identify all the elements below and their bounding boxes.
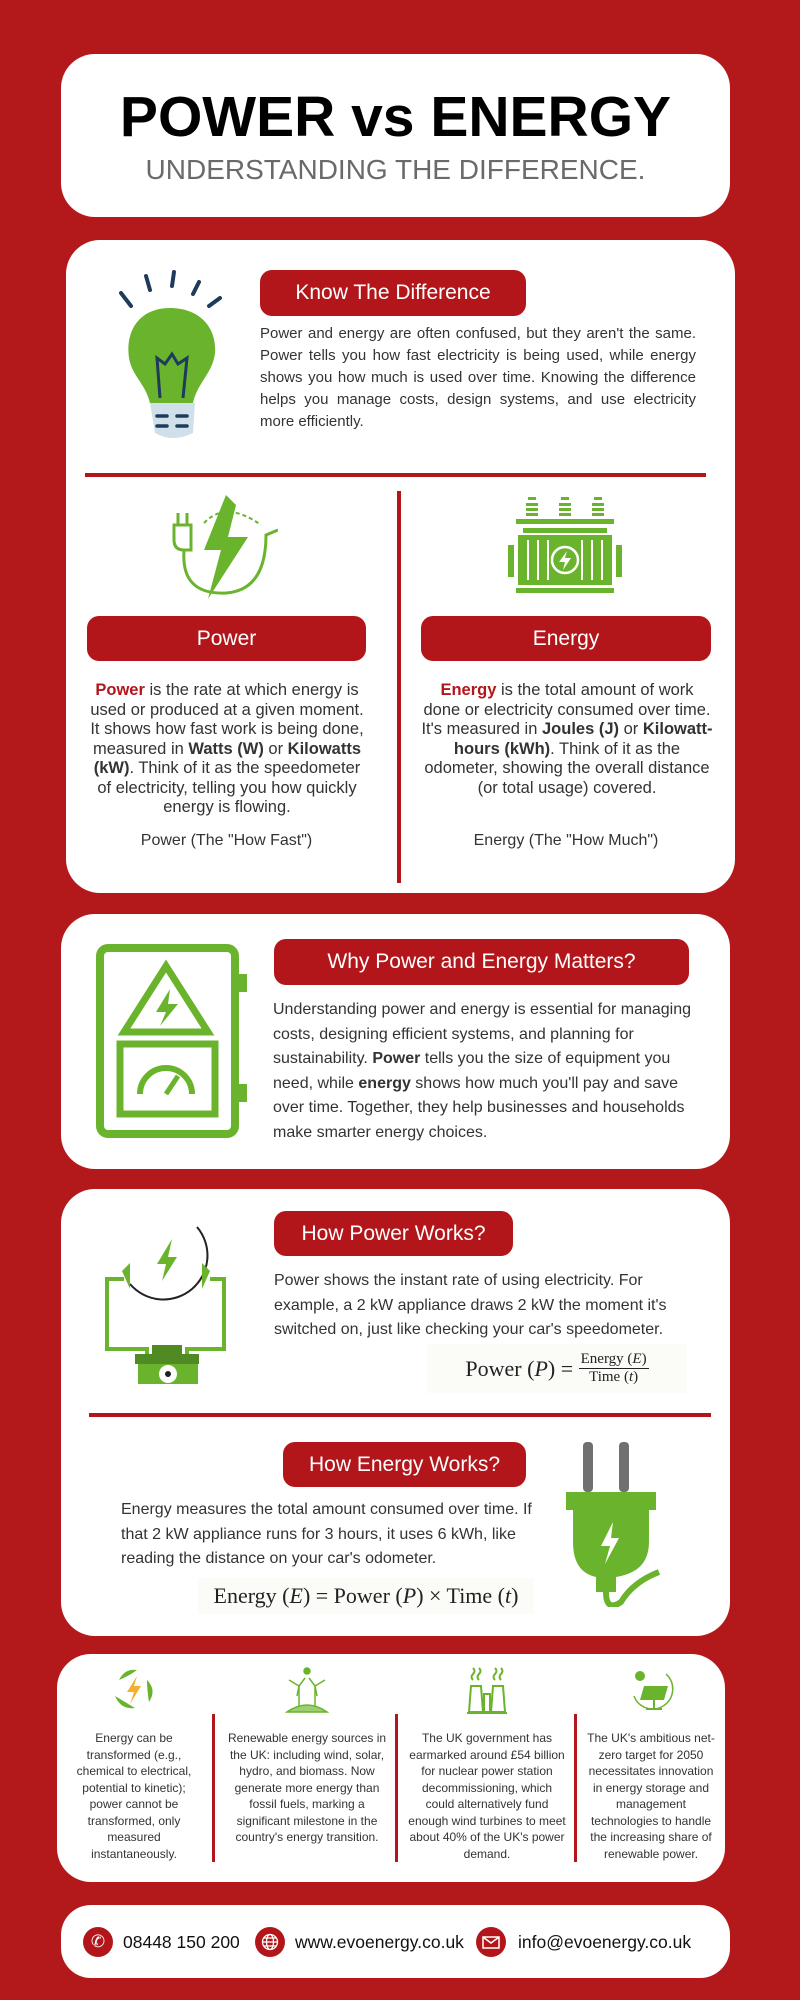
contact: email bbox=[476, 1927, 692, 1957]
fact 2 bbox=[228, 1667, 386, 1844]
formula: energy: P bbox=[403, 1583, 416, 1608]
contact: website: www.evoenergy.co.uk bbox=[295, 1932, 464, 1952]
formula: energy: E bbox=[290, 1583, 303, 1608]
subtitle: UNDERSTANDING THE DIFFERENCE. bbox=[146, 154, 645, 185]
title: POWER vs ENERGY bbox=[120, 85, 671, 149]
text: energy explanation: Energy measures the total amount consumed over time. If that 2 kW appliance runs for 3 hours, it uses 6 kWh, like reading the distance on your car's odometer. bbox=[121, 1501, 532, 1567]
text: intro paragraph: Power and energy are often confused, but they aren't the same. Power tells you how fast electricity is being used, while energy shows you how much is used over time. Knowing the difference helps you manage costs, design systems, and use electricity more efficiently. bbox=[260, 325, 696, 430]
icon: battery circuit bbox=[105, 1226, 226, 1384]
text: energy definition: Energy is the total amount of work done or electricity consumed over time. It's measured in Joules (J) or Kilowatt-hours (kWh). Think of it as the odometer, showing the overall distance (or total usage) covered. bbox=[421, 681, 713, 796]
heading: how energy works: How Energy Works? bbox=[309, 1452, 500, 1476]
heading: how power works bbox=[274, 1211, 513, 1256]
fact 4 bbox=[587, 1671, 715, 1860]
icon: solar panel bbox=[633, 1671, 674, 1710]
formula: energy: t bbox=[505, 1583, 511, 1608]
heading: know the difference: Know The Difference bbox=[295, 281, 491, 304]
icon: transformer bbox=[508, 497, 622, 593]
heading: energy bbox=[421, 616, 711, 661]
icon: green plug bbox=[566, 1442, 660, 1607]
formula: power: Time (t) bbox=[589, 1369, 638, 1385]
text: why paragraph: Understanding power and energy is essential for managing costs, designing efficient systems, and planning for sustainability. Power tells you the size of equipment you need, while energy shows how much you'll pay and save over time. Together, they help businesses and households make smarter energy choices. bbox=[273, 1001, 691, 1140]
icon: envelope bbox=[476, 1927, 506, 1957]
icon: electric panel bbox=[96, 944, 247, 1138]
text: The UK government has earmarked around £54 billion for nuclear power station decommissioning, which could alternatively fund enough wind turbines to meet about 40% of the UK's power demand. bbox=[408, 1731, 566, 1860]
heading: power bbox=[87, 616, 366, 661]
fact 1 bbox=[77, 1670, 191, 1860]
panel: contact footer bbox=[61, 1905, 730, 1978]
formula: power: Energy (E) bbox=[581, 1351, 647, 1367]
icon: recycle energy bbox=[115, 1670, 152, 1708]
panel: facts bbox=[57, 1654, 725, 1882]
heading: why power and energy matters bbox=[274, 939, 689, 985]
formula: power: Power ( ) = bbox=[465, 1356, 573, 1380]
heading: why power and energy matters: Why Power and Energy Matters? bbox=[327, 950, 636, 973]
heading: know the difference bbox=[260, 270, 526, 316]
icon: globe bbox=[255, 1927, 285, 1957]
formula: energy bbox=[198, 1578, 534, 1614]
text: The UK's ambitious net-zero target for 2050 necessitates innovation in energy storage and management technologies to handle the increasing share of renewable power. bbox=[587, 1731, 715, 1860]
heading: energy: Energy bbox=[533, 626, 599, 650]
panel: why it matters bbox=[61, 914, 730, 1169]
contact: email: info@evoenergy.co.uk bbox=[518, 1932, 691, 1952]
icon: light bulb bbox=[118, 270, 222, 438]
text: Renewable energy sources in the UK: including wind, solar, hydro, and biomass. Now generate more energy than fossil fuels, marking a significant milestone in the country's energy transition. bbox=[228, 1731, 386, 1844]
icon: plug with lightning bbox=[172, 495, 278, 599]
formula: power: P bbox=[534, 1356, 548, 1380]
icon: phone: ✆ bbox=[91, 1932, 105, 1951]
title card bbox=[61, 54, 730, 217]
heading: power: Power bbox=[197, 626, 256, 650]
heading: how energy works bbox=[283, 1442, 526, 1487]
formula: energy: Energy ( ) = Power ( ) × Time ( ) bbox=[214, 1583, 518, 1608]
contact: phone bbox=[83, 1927, 240, 1957]
caption: power: Power (The "How Fast") bbox=[141, 832, 312, 849]
contact: website bbox=[255, 1927, 464, 1957]
text: Energy can be transformed (e.g., chemical to electrical, potential to kinetic); power cannot be transformed, only measured instantaneously. bbox=[77, 1731, 191, 1860]
panel: how it works bbox=[61, 1189, 730, 1636]
caption: energy: Energy (The "How Much") bbox=[474, 832, 658, 849]
icon: power station bbox=[467, 1667, 507, 1714]
icon: phone bbox=[83, 1927, 113, 1957]
text: power definition: Power is the rate at which energy is used or produced at a given moment. It shows how fast work is being done, measured in Watts (W) or Kilowatts (kW). Think of it as the speedometer of electricity, telling you how quickly energy is flowing. bbox=[90, 681, 364, 816]
contact: phone: 08448 150 200 bbox=[123, 1932, 240, 1952]
panel: know the difference bbox=[66, 240, 735, 893]
fact 3 bbox=[408, 1667, 566, 1860]
formula: power bbox=[427, 1344, 687, 1393]
text: power explanation: Power shows the instant rate of using electricity. For example, a 2 kW appliance draws 2 kW the moment it's switched on, just like checking your car's speedometer. bbox=[274, 1272, 667, 1338]
icon: wind turbines bbox=[285, 1667, 329, 1713]
heading: how power works: How Power Works? bbox=[302, 1222, 486, 1244]
